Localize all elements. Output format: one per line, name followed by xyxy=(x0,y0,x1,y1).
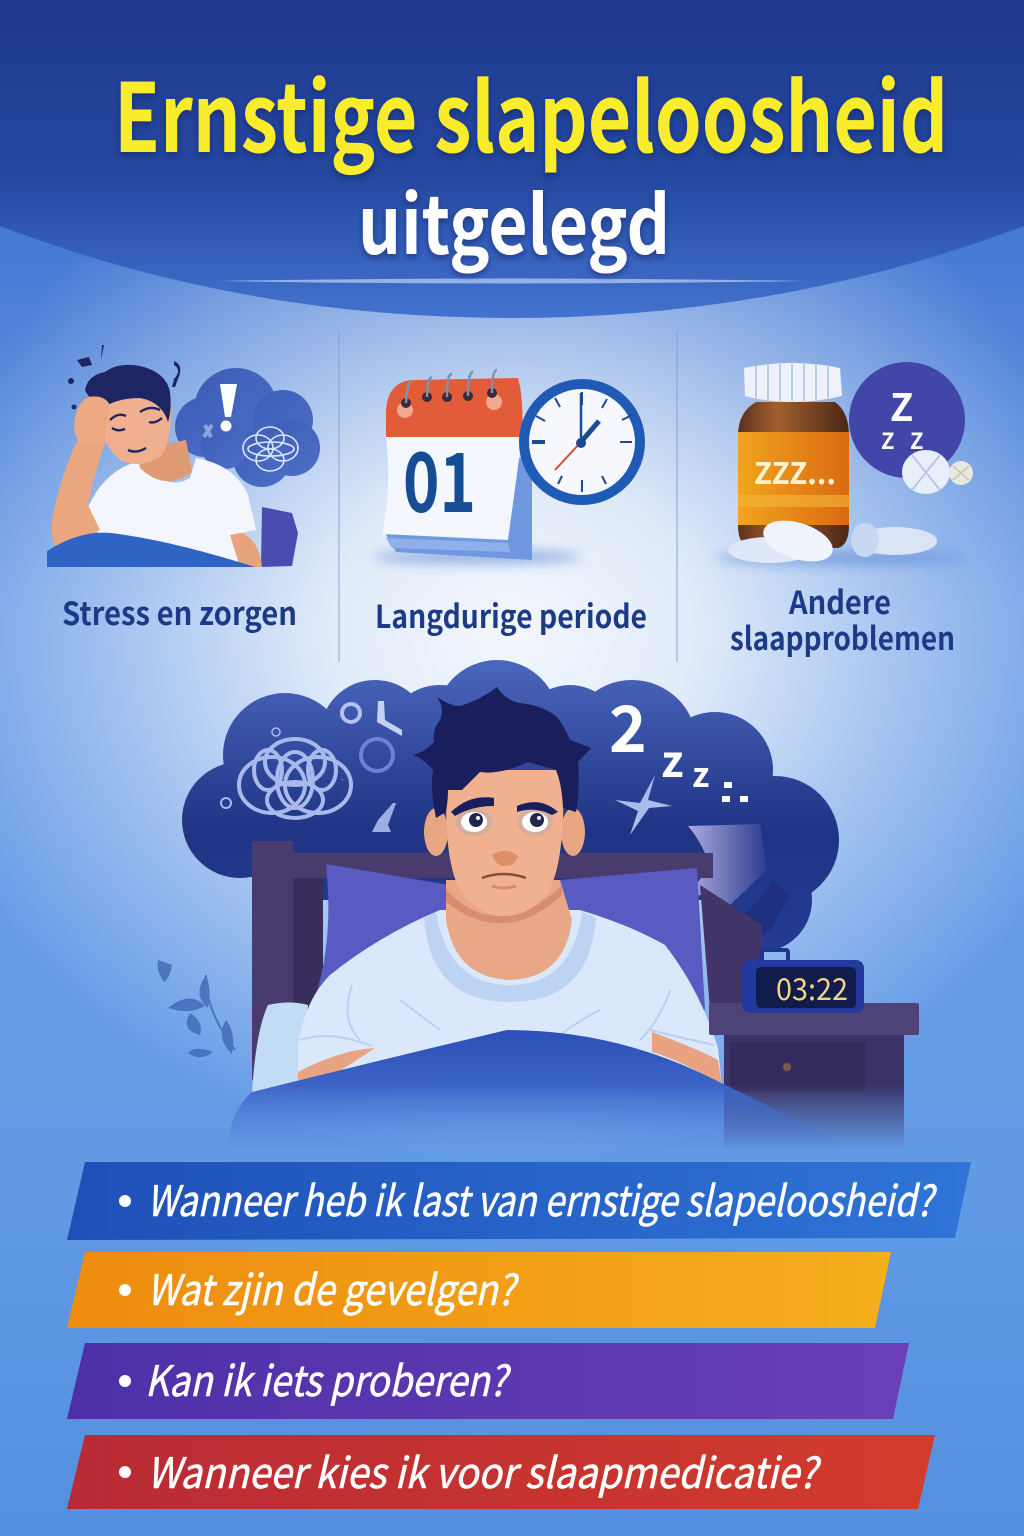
label: langdurige periode: Langdurige periode xyxy=(375,592,647,638)
icon: alarm clock: 03:22 xyxy=(776,965,848,1009)
shadow xyxy=(373,550,583,564)
icon: thought knot xyxy=(221,728,351,818)
icon: medicine bottle xyxy=(738,363,849,548)
icon: worry cloud xyxy=(175,368,320,487)
thought symbols xyxy=(342,701,402,832)
label: andere slaapproblemen: Andere xyxy=(788,578,891,624)
panel: stress en zorgen xyxy=(47,345,320,635)
question 2: Wat zjin de gevelgen? xyxy=(147,1257,519,1318)
icon: moon badge: Z xyxy=(881,424,894,456)
sleep letters xyxy=(609,679,748,802)
header underline xyxy=(218,278,806,284)
icon: pills xyxy=(728,450,973,569)
label: andere slaapproblemen xyxy=(730,578,955,660)
question 4: Wanneer kies ik voor slaapmedicatie? xyxy=(147,1440,822,1501)
ears xyxy=(424,808,585,856)
thought cloud xyxy=(182,660,839,952)
panel: question bars xyxy=(67,1162,971,1509)
icon: nightstand xyxy=(709,1003,919,1155)
star spark xyxy=(615,775,672,835)
icon: alarm clock xyxy=(742,950,864,1013)
icon: moon badge: Z xyxy=(890,377,913,432)
arms xyxy=(298,1032,722,1095)
icon: calendar xyxy=(382,370,532,560)
question 4 xyxy=(67,1435,935,1509)
icon: moon badge: Z xyxy=(910,424,924,456)
icon: stressed man xyxy=(47,345,298,567)
eyebrows xyxy=(451,797,558,816)
panel: dividers xyxy=(339,332,677,662)
nose and mouth xyxy=(482,851,526,888)
sleep letters: z xyxy=(661,726,683,790)
small pillow xyxy=(252,1002,308,1092)
torn speech bubble xyxy=(680,824,790,950)
panel: langdurige periode xyxy=(373,370,647,638)
icon: moon badge xyxy=(849,362,965,478)
icon: medicine bottle: ZZZ... xyxy=(754,449,836,493)
question 2 xyxy=(67,1252,891,1328)
question 3 xyxy=(67,1343,909,1419)
icon: calendar: 01 xyxy=(403,417,476,536)
header banner xyxy=(0,0,1024,318)
question 1 xyxy=(67,1162,971,1240)
shadow xyxy=(715,551,965,565)
face xyxy=(446,770,563,916)
pillow xyxy=(310,864,705,1010)
label: stress en zorgen: Stress en zorgen xyxy=(62,589,297,635)
illustration: man awake in bed xyxy=(158,660,919,1165)
icon: clock xyxy=(524,384,640,500)
shirt xyxy=(298,910,722,1085)
question 3: Kan ik iets proberen? xyxy=(145,1348,511,1409)
title xyxy=(114,43,948,278)
hair xyxy=(413,687,591,818)
blanket xyxy=(229,1030,811,1138)
title: uitgelegd xyxy=(358,162,670,278)
sleep letters: 2 xyxy=(609,679,647,771)
icon: plant xyxy=(158,960,235,1057)
label: andere slaapproblemen: slaapproblemen xyxy=(730,614,955,660)
eyes xyxy=(456,808,553,836)
sleep letters: z xyxy=(692,748,709,797)
panel: andere slaapproblemen xyxy=(715,362,973,660)
neck xyxy=(446,880,572,980)
headboard xyxy=(252,841,762,1081)
